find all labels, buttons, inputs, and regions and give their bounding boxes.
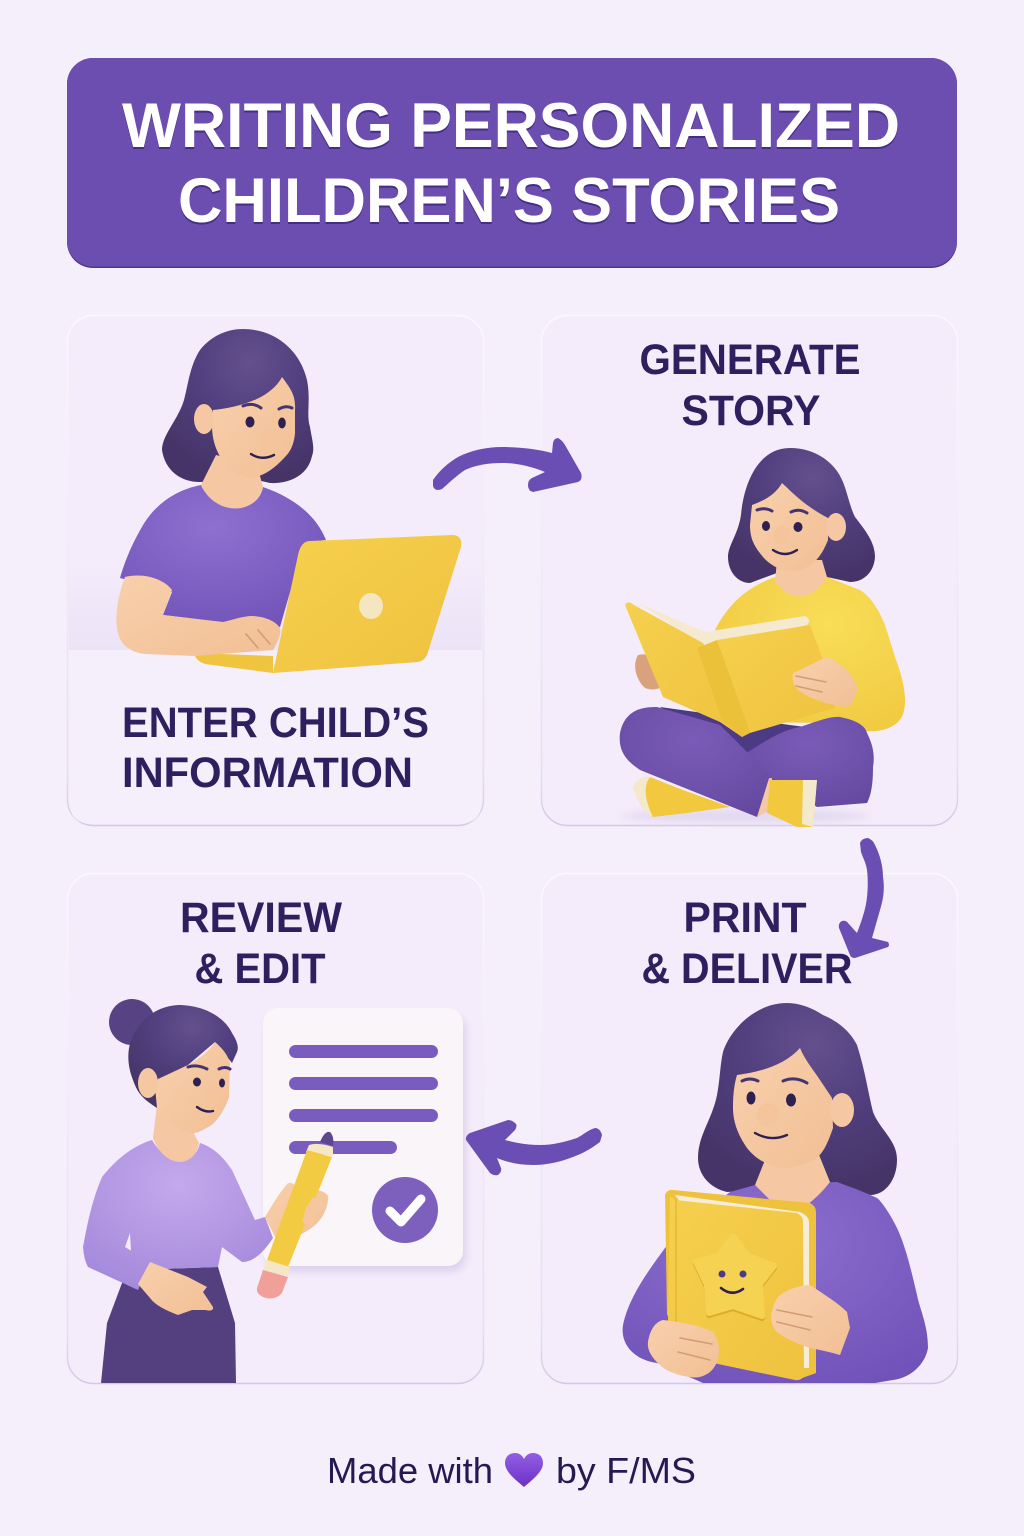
label: generate story: [640, 336, 860, 435]
label: print and deliver: [642, 894, 852, 993]
arrow: step 3 to step 4: [466, 1120, 602, 1175]
document with check mark: [263, 1008, 466, 1272]
footer credit: by F/MS: [556, 1450, 696, 1491]
icon: purple heart: [505, 1453, 543, 1487]
illustration: girl reading a book: [620, 448, 905, 827]
footer credit: Made with: [327, 1450, 493, 1491]
label: review and edit: REVIEW: [180, 894, 342, 942]
label: print and deliver: & DELIVER: [642, 945, 852, 993]
label: enter child's information: [122, 699, 429, 797]
icon: check mark badge: [372, 1177, 438, 1243]
icon: pencil: [257, 1132, 333, 1298]
illustration: woman holding finished book: [623, 1003, 928, 1383]
label: enter child's information: ENTER CHILD’S: [122, 699, 429, 747]
panel: print and deliver: [542, 874, 958, 1384]
illustration: woman typing on laptop: [116, 329, 461, 673]
label: review and edit: [180, 894, 342, 993]
panel: review and edit: [68, 874, 484, 1384]
title banner: WRITING PERSONALIZED: [122, 91, 900, 161]
panel: generate story: [542, 316, 958, 827]
icon: yellow book with star: [665, 1190, 816, 1380]
arrow: step 2 to step 3: [839, 838, 889, 958]
title banner: [67, 58, 957, 268]
label: print and deliver: PRINT: [684, 894, 806, 942]
label: enter child's information: INFORMATION: [122, 749, 413, 797]
arrow: step 1 to step 2: [433, 438, 582, 492]
label: generate story: GENERATE: [640, 336, 860, 384]
footer credit: [327, 1450, 696, 1491]
panel: enter child's information: [68, 316, 484, 826]
illustration: woman editing with pencil: [83, 999, 333, 1383]
hands holding book: [648, 1285, 850, 1377]
title banner: CHILDREN’S STORIES: [178, 166, 840, 236]
label: review and edit: & EDIT: [194, 945, 326, 993]
label: generate story: STORY: [682, 387, 820, 435]
